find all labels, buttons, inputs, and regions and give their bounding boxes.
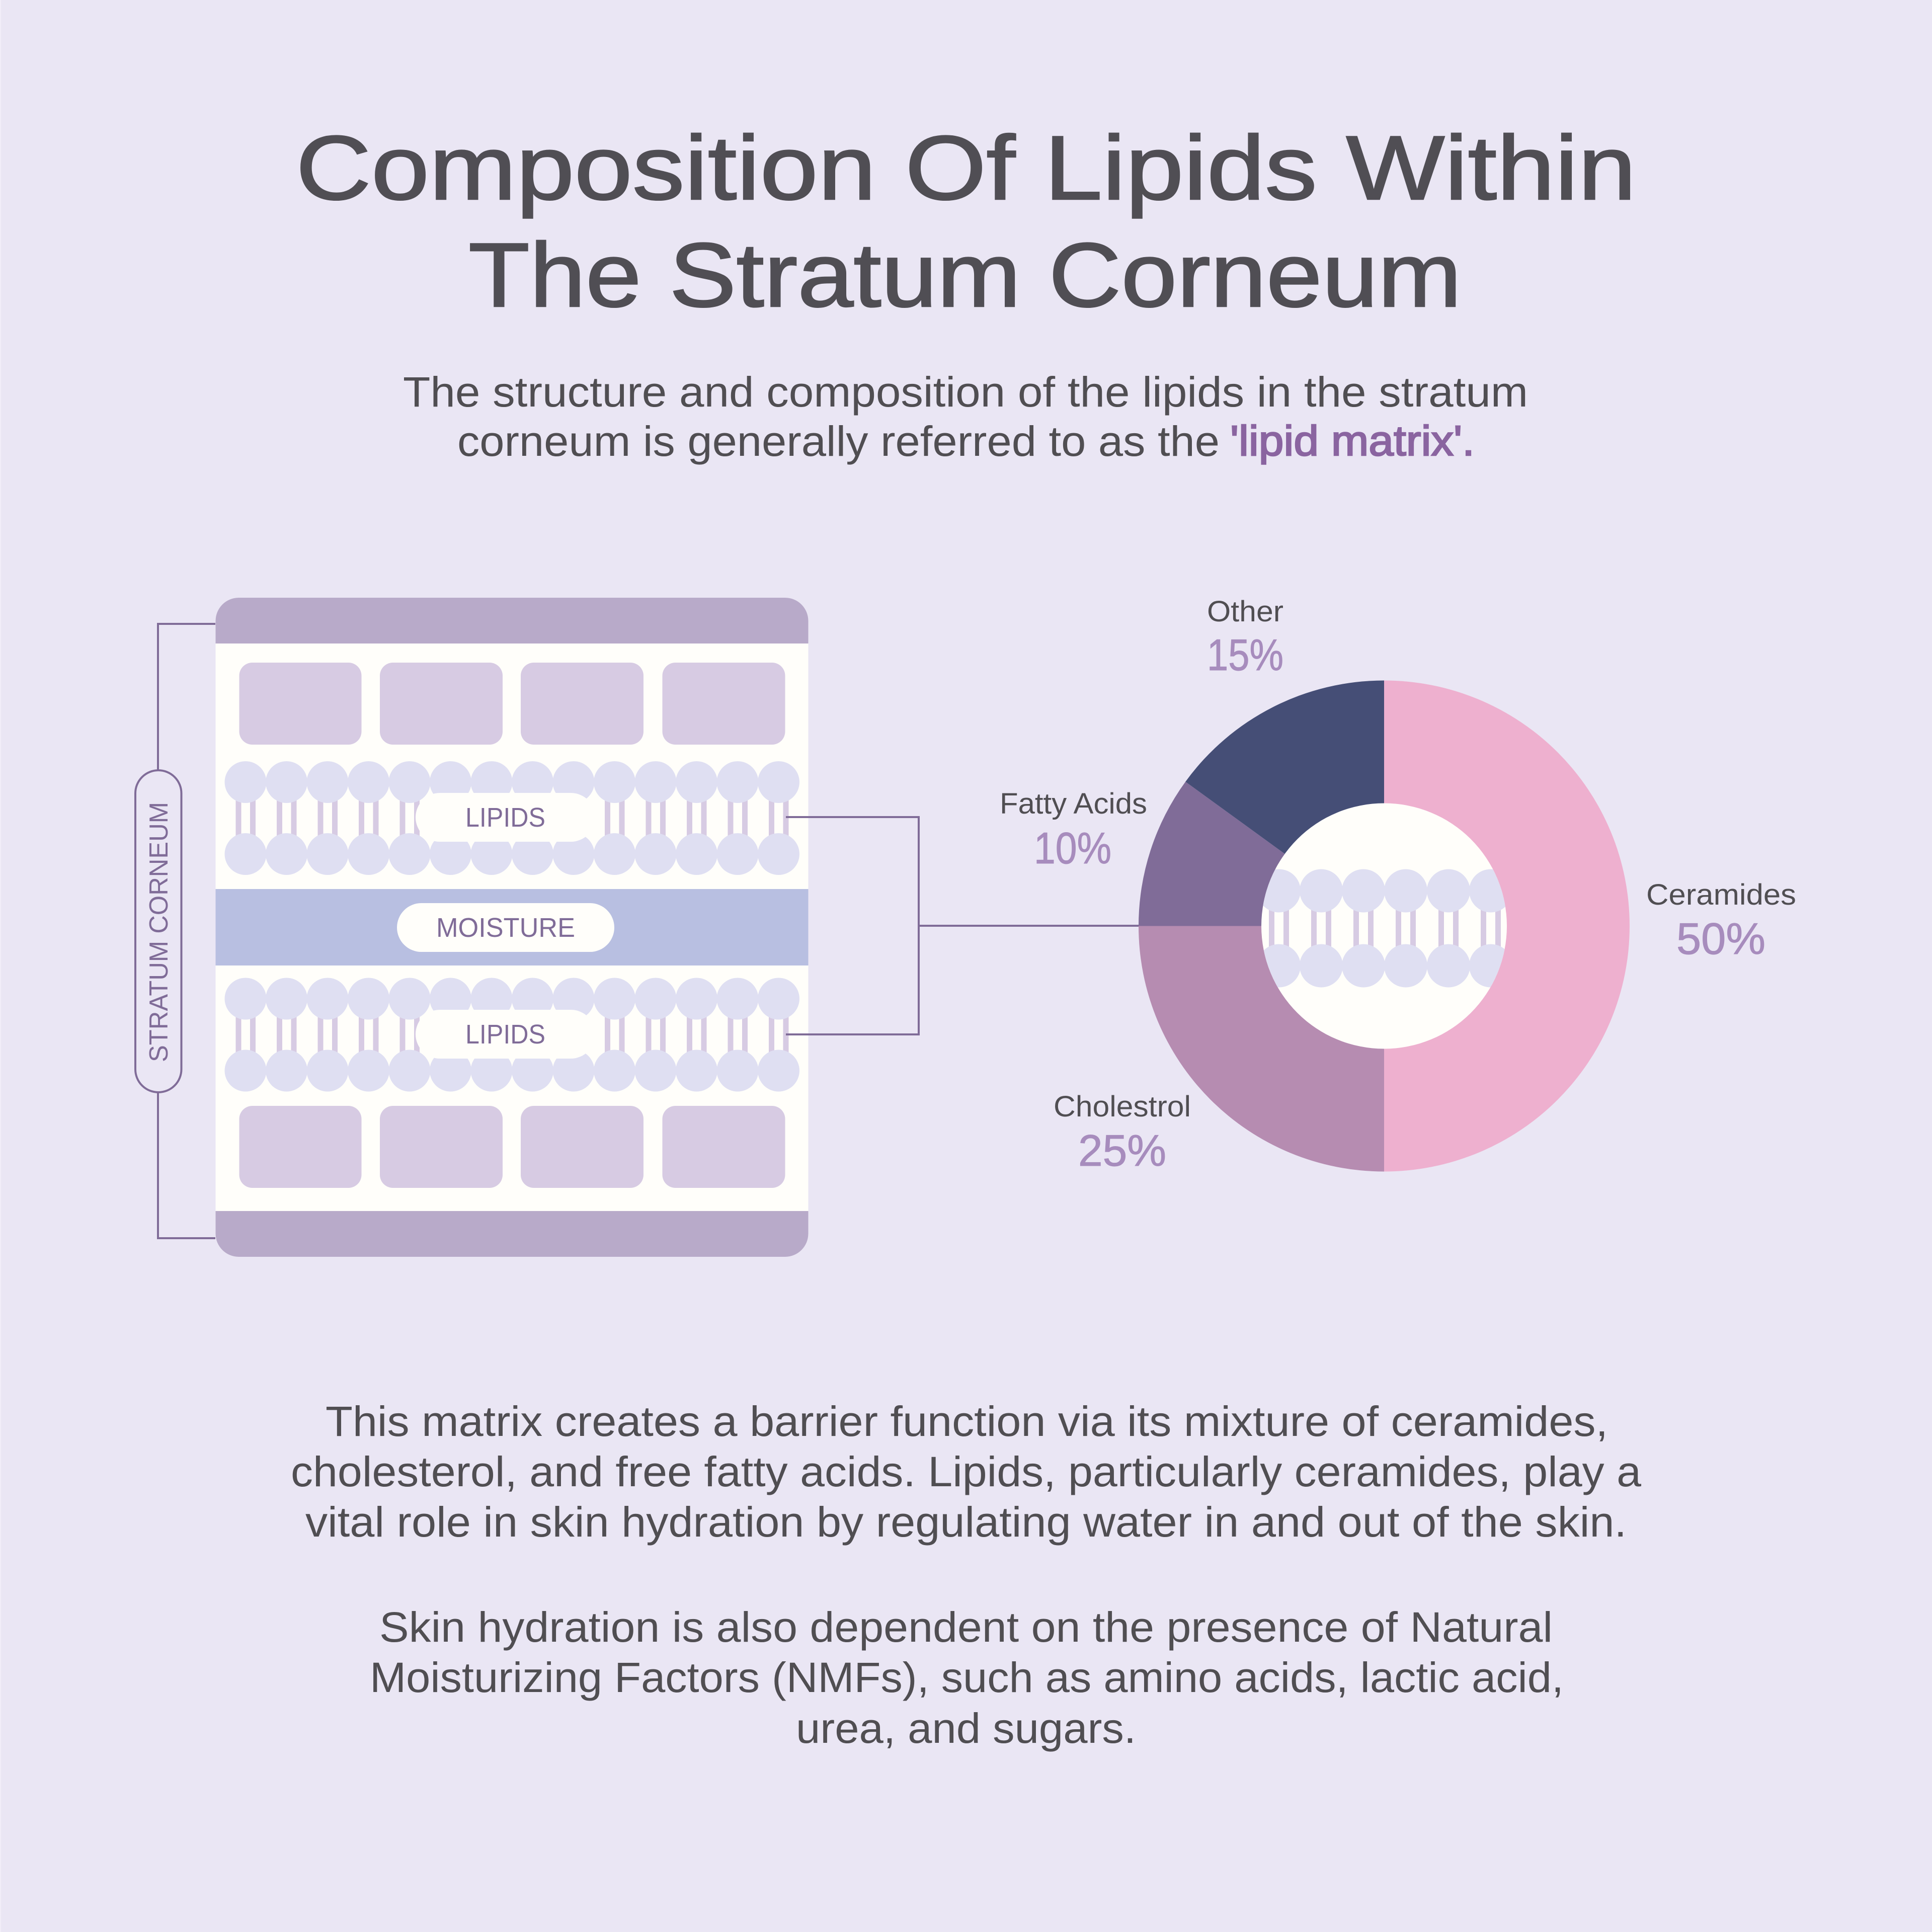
intro text: corneum is generally referred to as the — [457, 418, 1220, 465]
label: ceramides: 50% — [1676, 914, 1765, 963]
panel: skin layer diagram — [215, 598, 808, 1257]
body paragraph: natural moisturizing factors — [370, 1603, 1564, 1752]
title: Composition Of Lipids Within — [296, 117, 1636, 219]
label: ceramides: Ceramides — [1646, 878, 1796, 911]
label: fatty acids — [1000, 787, 1147, 873]
stratum corneum label — [135, 770, 181, 1092]
stratum corneum label: STRATUM CORNEUM — [144, 802, 174, 1062]
moisture label: MOISTURE — [436, 913, 575, 943]
title: The Stratum Corneum — [468, 224, 1462, 326]
intro text: 'lipid matrix'. — [1230, 417, 1475, 464]
label: cholestrol — [1054, 1090, 1191, 1175]
label: fatty acids: Fatty Acids — [1000, 787, 1147, 820]
body paragraph: barrier function — [291, 1398, 1641, 1546]
body paragraph: natural moisturizing factors: urea, and sugars. — [796, 1705, 1136, 1752]
upper lipid bilayer — [224, 761, 799, 875]
label: other: Other — [1207, 595, 1283, 628]
label: cholestrol: 25% — [1078, 1125, 1166, 1175]
lower lipids label: LIPIDS — [465, 1019, 545, 1050]
moisture label — [397, 903, 614, 952]
donut chart — [1139, 680, 1630, 1171]
slice: fatty acids 10% — [1139, 782, 1384, 926]
intro text — [403, 368, 1528, 465]
label: cholestrol: Cholestrol — [1054, 1090, 1191, 1123]
lower lipid bilayer — [224, 978, 799, 1092]
upper lipids label: LIPIDS — [465, 802, 545, 833]
donut centre with lipid bilayer — [1257, 803, 1512, 1049]
label: other: 15% — [1207, 630, 1283, 680]
slice: other 15% — [1185, 680, 1384, 926]
body paragraph: natural moisturizing factors: Skin hydration is also dependent on the presence of Natural — [379, 1603, 1553, 1651]
slice: cholesterol 25% — [1139, 926, 1384, 1171]
label: fatty acids: 10% — [1034, 823, 1111, 873]
connector arrow from lipids to chart — [786, 817, 1140, 1034]
intro text: The structure and composition of the lipids in the stratum — [403, 368, 1528, 416]
title — [296, 117, 1636, 326]
body paragraph: natural moisturizing factors: Moisturizing Factors (NMFs), such as amino acids, lactic acid, — [370, 1654, 1564, 1701]
label: ceramides — [1646, 878, 1796, 963]
label: other — [1207, 595, 1283, 680]
body paragraph: barrier function: This matrix creates a barrier function via its mixture of ceramides, — [326, 1398, 1608, 1445]
slice: ceramides 50% — [1384, 680, 1630, 1171]
upper lipids label — [416, 793, 595, 842]
body paragraph: barrier function: vital role in skin hydration by regulating water in and out of the skin. — [305, 1498, 1627, 1546]
lower lipids label — [416, 1010, 595, 1059]
bottom corneocyte cells — [239, 1106, 785, 1188]
top corneocyte cells — [239, 663, 785, 745]
body paragraph: barrier function: cholesterol, and free fatty acids. Lipids, particularly ceramides, play a — [291, 1448, 1641, 1495]
stratum corneum bracket — [158, 624, 215, 1238]
